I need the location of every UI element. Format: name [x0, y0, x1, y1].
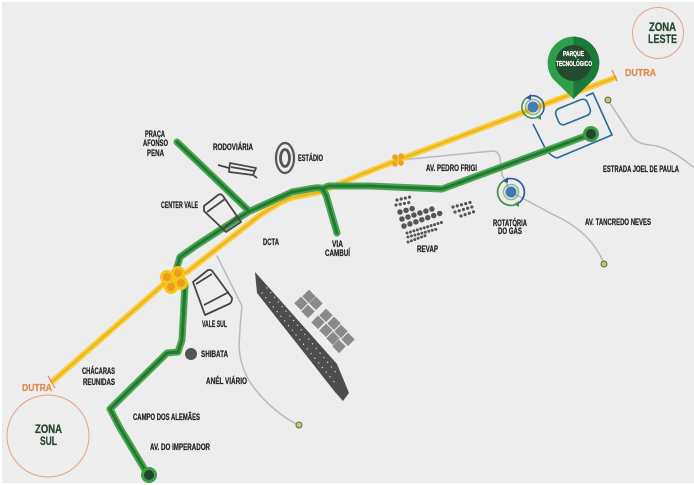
large interchange: [160, 266, 188, 294]
route endpoint: Av. do Imperador: [141, 467, 157, 483]
label: Revap: REVAP: [417, 244, 438, 254]
label: Praça Afonso Pena: PENA: [147, 148, 164, 158]
icon: Vale Sul: [193, 270, 232, 315]
road: Estrada Joel de Paula: [605, 97, 693, 167]
location pin: Parque Tecnológico: TECNOLÓGICO: [556, 59, 592, 68]
location pin: Parque Tecnológico: [548, 36, 599, 99]
small interchange: [392, 153, 404, 167]
green route: main corridor: [110, 134, 591, 475]
label: Av. Pedro Frigi: AV. PEDRO FRIGI: [426, 163, 477, 173]
road: Anel Viário: [217, 256, 302, 428]
label: Via Cambuí: VIA: [332, 239, 343, 249]
label: Rotatória do Gás: DO GÁS: [498, 226, 522, 236]
label: Chácaras Reunidas: CHÁCARAS: [82, 366, 115, 376]
icon: Rodoviária: [218, 163, 257, 178]
REVAP tanks: [396, 197, 476, 242]
label: Dutra east: DUTRA: [625, 68, 656, 79]
zone: Zona Sul: SUL: [40, 436, 57, 448]
DCTA runway: [255, 272, 349, 401]
label: Av. Tancredo Neves: AV. TANCREDO NEVES: [585, 217, 651, 227]
label: Av. do Imperador: AV. DO IMPERADOR: [150, 442, 210, 452]
label: Praça Afonso Pena: [143, 129, 168, 158]
roundabout: Rotatória do Gás: [498, 177, 524, 207]
label: Chácaras Reunidas: REUNIDAS: [83, 377, 115, 387]
zone: Zona Leste: [632, 8, 684, 58]
zone: Zona Sul: [7, 395, 89, 477]
route endpoint: park: [583, 126, 599, 142]
zone: Zona Sul: ZONA: [35, 424, 62, 436]
icon: Center Vale: [204, 194, 241, 232]
zone: Zona Leste: ZONA: [649, 22, 676, 34]
highway: Dutra: [48, 70, 617, 388]
label: Anel Viário: ANÉL VIÁRIO: [206, 376, 247, 386]
DCTA hangars: [294, 290, 355, 353]
label: Praça Afonso Pena: PRAÇA: [145, 129, 165, 139]
label: Rotatória do Gás: ROTATÓRIA: [493, 217, 527, 228]
label: Via Cambuí: [325, 239, 350, 258]
technology park outline: [533, 93, 612, 158]
label: Dutra south: DUTRA: [22, 383, 52, 394]
icon: Shibata: [185, 348, 197, 360]
label: Center Vale: CENTER VALE: [161, 200, 198, 210]
label: Estádio: ESTÁDIO: [298, 153, 323, 163]
location pin: Parque Tecnológico: PARQUE: [563, 51, 584, 58]
label: Vale Sul: VALE SUL: [202, 319, 227, 329]
zone: Zona Leste: LESTE: [648, 34, 677, 46]
label: DCTA: DCTA: [263, 237, 279, 247]
roundabout: park: [522, 94, 544, 120]
label: Rodoviária: RODOVIÁRIA: [213, 142, 253, 152]
icon: Estádio: [276, 143, 294, 173]
road: Avenida Tancredo Neves: [400, 151, 607, 267]
label: Campo dos Alemães: CAMPO DOS ALEMÃES: [133, 412, 200, 422]
label: Shibata: SHIBATA: [201, 349, 228, 359]
label: Rotatória do Gás: [493, 217, 527, 236]
label: Praça Afonso Pena: AFONSO: [143, 138, 168, 148]
label: Via Cambuí: CAMBUÍ: [325, 248, 350, 258]
label: Chácaras Reunidas: [82, 366, 115, 387]
